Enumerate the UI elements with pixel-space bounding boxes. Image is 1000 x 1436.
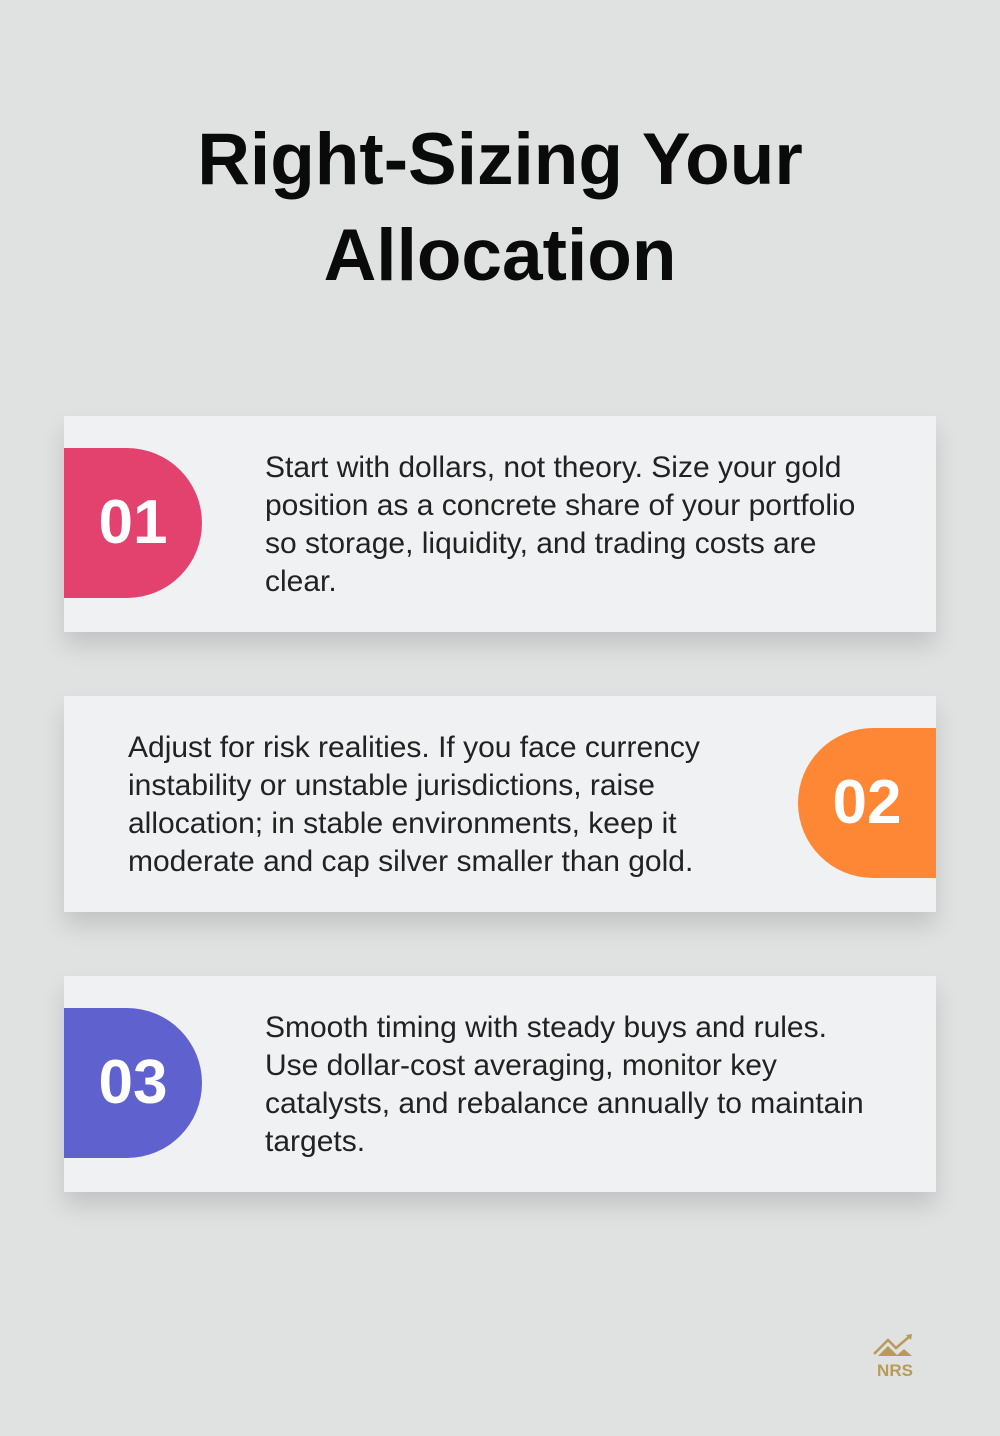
title: Right-Sizing Your <box>197 119 803 200</box>
card 2 <box>64 696 936 912</box>
text 1: Start with dollars, not theory. Size your gold <box>265 451 841 484</box>
badge 01 <box>64 448 202 598</box>
text 1 <box>265 451 855 598</box>
text 3: Smooth timing with steady buys and rules. <box>265 1011 827 1044</box>
badge 03: 03 <box>99 1048 167 1117</box>
card 3 <box>64 976 936 1192</box>
badge 02 <box>798 728 936 878</box>
badge 01: 01 <box>99 488 167 557</box>
text 2 <box>128 731 700 878</box>
text 3 <box>265 1011 864 1158</box>
logo: NRS <box>877 1361 913 1380</box>
logo <box>873 1334 913 1380</box>
text 2: instability or unstable jurisdictions, raise <box>128 769 655 802</box>
card 1 <box>64 416 936 632</box>
text 3: targets. <box>265 1125 365 1158</box>
title <box>197 119 803 296</box>
text 2: allocation; in stable environments, keep it <box>128 807 677 840</box>
badge 02: 02 <box>833 768 901 837</box>
text 1: so storage, liquidity, and trading costs are <box>265 527 816 560</box>
text 3: Use dollar-cost averaging, monitor key <box>265 1049 777 1082</box>
title: Allocation <box>324 215 676 296</box>
text 2: Adjust for risk realities. If you face currency <box>128 731 700 764</box>
text 3: catalysts, and rebalance annually to maintain <box>265 1087 864 1120</box>
text 1: position as a concrete share of your portfolio <box>265 489 855 522</box>
text 1: clear. <box>265 565 337 598</box>
text 2: moderate and cap silver smaller than gold. <box>128 845 693 878</box>
badge 03 <box>64 1008 202 1158</box>
